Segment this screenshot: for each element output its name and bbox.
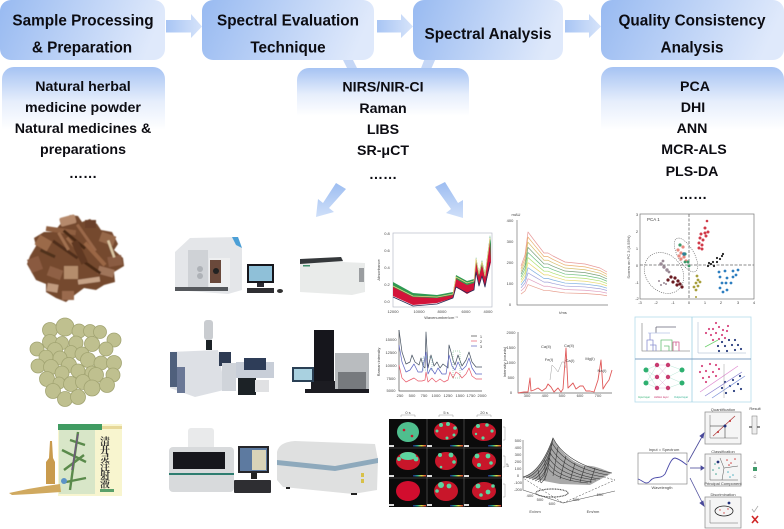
arrow: down left to instruments (316, 183, 346, 217)
photo: Raman microscope system (170, 320, 274, 397)
chart: LIBS emission spectrum (502, 330, 612, 398)
chart: 3D fluorescence surface: 500 (537, 497, 544, 502)
chart: Raman intensity spectra: 750 (421, 393, 428, 398)
chart: LIBS emission spectrum: Ca(I) (566, 358, 575, 363)
chart: PCA score plot: -2 (635, 296, 640, 301)
chart: Raman intensity spectra: 1 (480, 334, 483, 339)
heading box: Sample Processing & Preparation: Sample Processing (12, 12, 154, 30)
chart: Raman intensity spectra: 1750 (467, 393, 476, 398)
chart: PCA score plot: Scores on PC 3 (3.55%) (626, 235, 631, 279)
chart: PCA score plot: -3 (638, 300, 643, 305)
photo: injection box and ampoules: 射 (100, 469, 110, 482)
list panel: spectral techniques: Raman (359, 101, 407, 117)
classification box (704, 449, 742, 486)
neural network panel: Output layer (674, 395, 688, 399)
list panel: spectral techniques: …… (369, 167, 397, 183)
chart: UV absorbance curves (507, 212, 608, 315)
chart: Raman intensity spectra: 500 (409, 393, 416, 398)
support vector panel (699, 363, 745, 398)
chart: PCA score plot: 3 (737, 300, 740, 305)
chart: Raman intensity spectra: 15000 (385, 337, 397, 342)
list panel: sample types: …… (69, 166, 97, 182)
chart: PCA score plot: -1 (671, 300, 676, 305)
chart: PCA score plot: 2 (636, 229, 639, 234)
photo: green tablets (30, 318, 122, 406)
chart: 3D fluorescence surface: 600 (597, 492, 604, 497)
chart: Raman intensity spectra: 1000 (432, 393, 441, 398)
classification box: Principal Component (704, 481, 742, 486)
heading box: Spectral Evaluation Technique: Spectral Evaluation (217, 12, 359, 30)
chart: PCA score plot: 0 (688, 300, 691, 305)
result column (749, 406, 762, 523)
heading box: Quality Consistency Analysis (601, 0, 784, 60)
list panel: spectral techniques: SR-μCT (357, 143, 409, 159)
list panel: sample types (2, 67, 165, 182)
chart: SR-μCT image grid (389, 410, 505, 507)
chart: LIBS emission spectrum: Na(I) (598, 368, 607, 373)
photo: injection box and ampoules: 开 (100, 444, 110, 456)
chart: SR-μCT image grid: 5 s (443, 410, 449, 415)
chart: 3D fluorescence surface: Em/nm (587, 509, 600, 514)
chart: PCA score plot: 1 (636, 246, 639, 251)
list panel: quality analysis methods: ANN (677, 121, 707, 137)
list panel: spectral techniques: LIBS (367, 122, 399, 138)
arrow: step 1 to step 2 (166, 14, 202, 38)
list panel: sample types: Natural medicines & (15, 121, 151, 137)
chart: PCA score plot: 4 (753, 300, 756, 305)
chart: NIR absorbance spectra: 0.8 (384, 231, 391, 236)
chart: NIR absorbance spectra: 0.2 (384, 282, 391, 287)
chart: Raman intensity spectra: 250 (397, 393, 404, 398)
figure: four-panel chemometric models (635, 317, 751, 402)
chart: UV absorbance curves: 0 (509, 302, 512, 307)
chart: UV absorbance curves: 100 (507, 281, 514, 286)
photo: benchtop spectrometer (300, 257, 365, 295)
figure: spectrum input to quantification, classification, discrimination (638, 406, 762, 528)
result column: A (754, 460, 757, 465)
arrow: down right to spectra (435, 182, 463, 218)
chart: PCA score plot: PCA 1 (647, 217, 660, 222)
chart: 3D fluorescence surface: 400 (515, 445, 522, 450)
chart: Raman intensity spectra: 2 (480, 339, 483, 344)
chart: PCA score plot: -2 (654, 300, 659, 305)
chart: 3D fluorescence surface: -100 (514, 480, 523, 485)
chart: Raman intensity spectra: 2000 (478, 393, 487, 398)
chart: 3D fluorescence surface: -200 (514, 487, 523, 492)
photo: herbal pieces (27, 214, 124, 302)
dendrogram panel (642, 323, 690, 351)
chart: LIBS emission spectrum: 400 (542, 393, 549, 398)
chart: NIR absorbance spectra (376, 231, 493, 320)
chart: PCA score plot: 1 (704, 300, 707, 305)
chart: UV absorbance curves: t/ms (559, 310, 567, 315)
chart: PCA score plot: 3 (636, 212, 639, 217)
arrow: step 3 to step 4 (565, 14, 601, 38)
list panel: quality analysis methods: DHI (681, 100, 705, 116)
chart: NIR absorbance spectra: Absorbance (376, 259, 381, 281)
chart: 3D fluorescence surface: 300 (515, 452, 522, 457)
heading box: Spectral Analysis (413, 0, 563, 60)
chart: LIBS emission spectrum: 600 (577, 393, 584, 398)
chart: LIBS emission spectrum: 1000 (507, 360, 516, 365)
photo: fluorescence spectrometer (277, 441, 378, 495)
chart: Raman intensity spectra: 1250 (444, 393, 453, 398)
list panel: quality analysis methods: …… (679, 187, 707, 203)
heading box: Spectral Analysis: Spectral Analysis (425, 26, 551, 43)
chart: PCA score plot (626, 212, 756, 305)
heading box: Spectral Evaluation Technique: Technique (250, 40, 326, 56)
heading box: Quality Consistency Analysis: Quality Consistency (618, 12, 766, 30)
input spectrum plot: Wavelength (652, 485, 672, 490)
chart: LIBS emission spectrum: Intensity (counts) (502, 346, 507, 377)
chart: 3D fluorescence surface: 400 (573, 497, 580, 502)
arrow: step 2 to step 3 (377, 14, 413, 38)
photo: injection box and ampoules: 清 (100, 435, 110, 448)
photo: injection box and ampoules (9, 424, 122, 496)
chart: LIBS emission spectrum: 500 (508, 375, 515, 380)
chart: NIR absorbance spectra: 10000 (413, 309, 425, 314)
result column: C (754, 474, 757, 479)
quantification box: Quantification (711, 407, 735, 412)
chart: LIBS emission spectrum: 700 (595, 393, 602, 398)
input spectrum plot: Input = Spectrum (649, 447, 680, 452)
chart: NIR absorbance spectra: 0.0 (384, 299, 391, 304)
chart: 3D fluorescence surface: 200 (515, 459, 522, 464)
classification box: Classification (711, 449, 735, 454)
list panel: quality analysis methods: PCA (680, 79, 710, 95)
list panel: quality analysis methods (601, 67, 784, 203)
chart: LIBS emission spectrum: 2000 (507, 330, 516, 335)
chart: UV absorbance curves: 300 (507, 239, 514, 244)
chart: LIBS emission spectrum: Mg(I) (585, 356, 595, 361)
chart: NIR absorbance spectra: 0.6 (384, 248, 391, 253)
list panel: quality analysis methods: PLS-DA (666, 164, 718, 180)
chart: Raman intensity spectra: 3 (480, 344, 483, 349)
photo: LIBS instrument tower (292, 330, 369, 393)
chart: LIBS emission spectrum: 500 (559, 393, 566, 398)
chart: UV absorbance curves: 400 (507, 218, 514, 223)
chart: Raman intensity spectra (376, 330, 487, 398)
neural network panel (638, 363, 688, 399)
photo: NIR spectrometer with monitor (175, 237, 283, 294)
chart: NIR absorbance spectra: 4000 (484, 309, 493, 314)
chart: LIBS emission spectrum: 1500 (507, 345, 516, 350)
chart: 3D fluorescence surface: 500 (515, 438, 522, 443)
chart: NIR absorbance spectra: Wavenumber/cm⁻¹ (424, 315, 458, 320)
connector: analysis box to technique list (418, 58, 436, 76)
chart: 3D fluorescence surface: 100 (515, 466, 522, 471)
neural network panel: Hidden layer (654, 395, 669, 399)
list panel: spectral techniques (297, 68, 469, 183)
chart: PCA score plot: -1 (635, 280, 640, 285)
chart: Raman intensity spectra: 7500 (387, 376, 396, 381)
chart: SR-μCT image grid: 20 s (480, 410, 488, 415)
chart: LIBS emission spectrum: Ca(II) (541, 344, 552, 349)
chart: 3D fluorescence surface (505, 438, 615, 514)
chart: 3D fluorescence surface: 0 (517, 473, 520, 478)
photo: injection box and ampoules: 注 (100, 460, 110, 474)
chart: NIR absorbance spectra: 12000 (387, 309, 399, 314)
chart: 3D fluorescence surface: Ex/nm (529, 509, 541, 514)
list panel: spectral techniques: NIRS/NIR-CI (342, 80, 424, 96)
chart: NIR absorbance spectra: 0.4 (384, 265, 391, 270)
photo: injection box and ampoules: 液 (100, 478, 110, 490)
chart: Raman intensity spectra: Raman intensity (376, 348, 381, 376)
heading box: Sample Processing & Preparation (0, 0, 165, 60)
chart: Raman intensity spectra: 1500 (456, 393, 465, 398)
heading box: Quality Consistency Analysis: Analysis (661, 40, 723, 56)
connector: evaluation box to technique list (342, 58, 358, 70)
heading box: Spectral Evaluation Technique (202, 0, 374, 60)
chart: LIBS emission spectrum: Fe(I) (545, 357, 554, 362)
chart: NIR absorbance spectra: 8000 (438, 309, 447, 314)
chart: UV absorbance curves: mAU (512, 212, 521, 217)
photo: X-ray imaging instrument with monitor (169, 428, 271, 493)
chart: LIBS emission spectrum: 0 (510, 390, 513, 395)
list panel: quality analysis methods: MCR-ALS (661, 142, 727, 158)
chart: Raman intensity spectra: 10000 (385, 363, 397, 368)
list panel: sample types: preparations (40, 142, 126, 158)
chart: SR-μCT image grid: 0 s (405, 410, 411, 415)
chart: Raman intensity spectra: 5000 (387, 388, 396, 393)
result column: Result (749, 406, 762, 411)
chart: UV absorbance curves: 200 (507, 260, 514, 265)
chart: LIBS emission spectrum: Ca(II) (564, 343, 575, 348)
heading box: Sample Processing & Preparation: & Preparation (32, 40, 132, 56)
chart: 3D fluorescence surface: 600 (549, 501, 556, 506)
neural network panel: Input layer (638, 395, 650, 399)
photo: injection box and ampoules: 灵 (100, 452, 110, 465)
list panel: sample types: medicine powder (25, 100, 141, 116)
chart: PCA score plot: 2 (720, 300, 723, 305)
list panel: sample types: Natural herbal (35, 79, 131, 95)
arrows to output boxes (688, 433, 704, 506)
chart: LIBS emission spectrum: 300 (524, 393, 531, 398)
chart: PCA score plot: 0 (636, 263, 639, 268)
chart: NIR absorbance spectra: 6000 (462, 309, 471, 314)
input spectrum plot (638, 447, 687, 490)
discrimination box: Discrimination (710, 492, 736, 497)
chart: Raman intensity spectra: 12500 (385, 350, 397, 355)
chart: 3D fluorescence surface: 400 (527, 493, 534, 498)
separated clusters panel (698, 322, 746, 353)
chart: 3D fluorescence surface: IF (505, 463, 510, 467)
